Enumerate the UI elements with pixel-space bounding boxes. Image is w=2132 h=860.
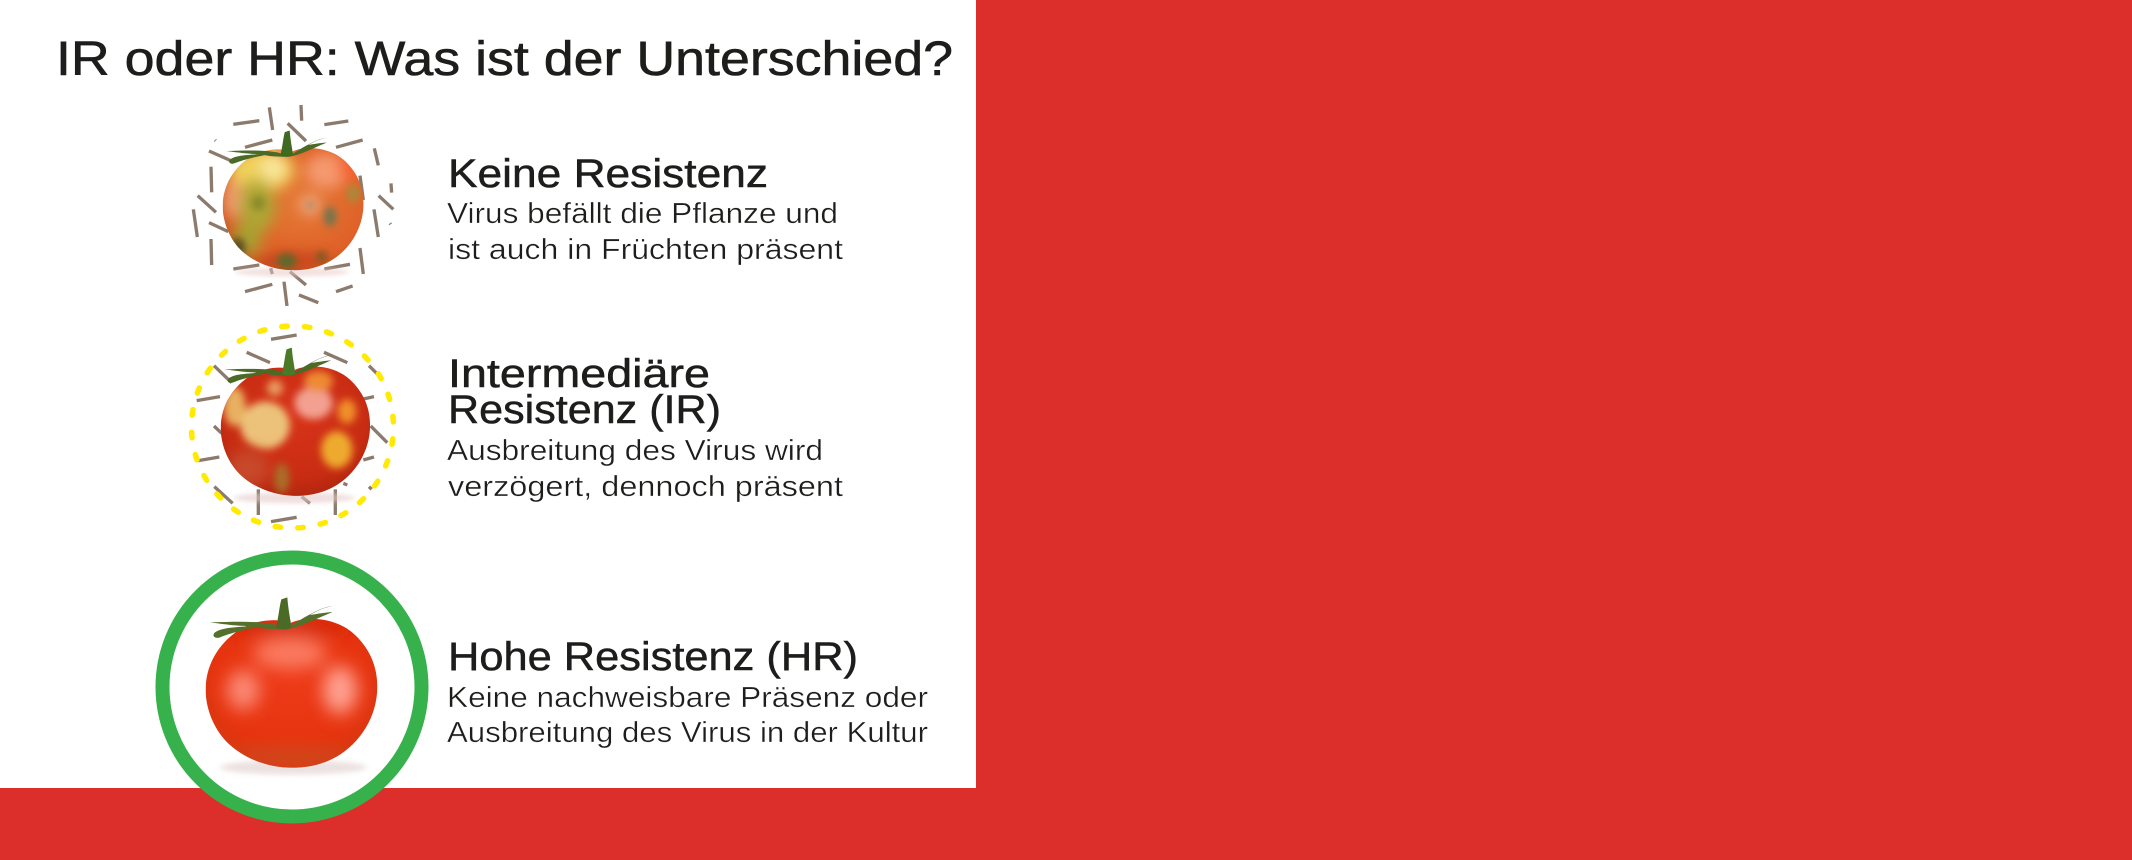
heading: intermediaere Resistenz: Intermediäre [448, 352, 710, 396]
icon: partly resistant tomato [219, 348, 372, 503]
virus particles: intermediaere Resistenz [197, 335, 387, 522]
description: intermediaere Resistenz: Ausbreitung des Virus wird [447, 435, 823, 467]
heading: intermediaere Resistenz [448, 352, 721, 432]
description: keine Resistenz: Virus befällt die Pflanze und [447, 198, 838, 230]
row: intermediaere Resistenz [192, 326, 843, 528]
title: IR oder HR: Was ist der Unterschied? [56, 33, 953, 86]
heading: hohe Resistenz: Hohe Resistenz (HR) [448, 635, 858, 679]
description: keine Resistenz: ist auch in Früchten präsent [448, 234, 843, 266]
icon: infected tomato [221, 131, 366, 276]
description: keine Resistenz [447, 198, 843, 266]
virus particles: keine Resistenz [193, 105, 393, 306]
row: hohe Resistenz [162, 558, 928, 816]
heading: intermediaere Resistenz: Resistenz (IR) [448, 388, 721, 432]
description: hohe Resistenz [447, 682, 928, 749]
icon: healthy tomato [203, 597, 380, 775]
white content panel [0, 0, 976, 788]
heading: keine Resistenz: Keine Resistenz [448, 152, 768, 196]
row: keine Resistenz [193, 105, 843, 306]
yellow dashed ring [192, 326, 394, 528]
description: hohe Resistenz: Keine nachweisbare Präsenz oder [447, 682, 928, 714]
description: hohe Resistenz: Ausbreitung des Virus in der Kultur [447, 717, 928, 749]
green ring [162, 558, 422, 816]
description: intermediaere Resistenz [447, 435, 843, 503]
description: intermediaere Resistenz: verzögert, dennoch präsent [448, 471, 843, 503]
